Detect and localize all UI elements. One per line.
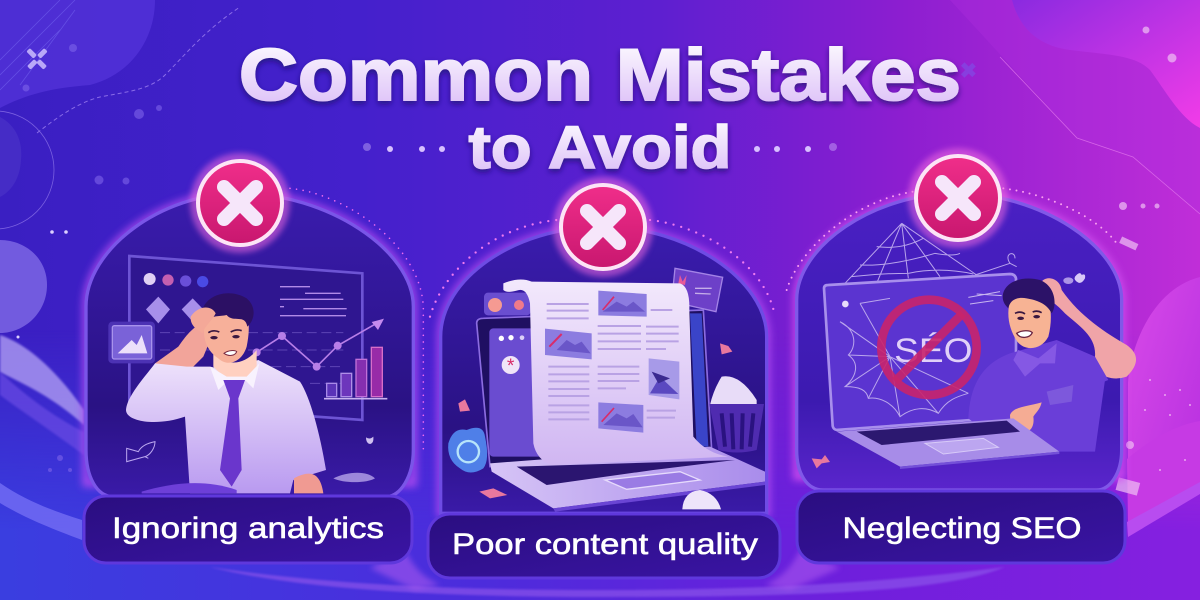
line chart [253, 319, 384, 371]
panel: neglecting seo [787, 188, 1136, 490]
badge: error x 2 [553, 177, 653, 277]
pill label: poor content quality [428, 514, 780, 578]
floating bubble icon [1063, 273, 1085, 284]
panel frame 2 [441, 227, 767, 513]
panel glow 2 [441, 227, 767, 513]
dashboard screen [129, 256, 362, 420]
hanger doodle [975, 254, 1017, 275]
laptop screen [477, 310, 712, 467]
title [239, 35, 961, 181]
floating note card [672, 268, 723, 312]
scribble [333, 473, 375, 482]
heart icon [366, 437, 373, 444]
pill label: poor content quality: Poor content quality [452, 528, 758, 561]
panel frame 1 [86, 193, 413, 497]
crumpled paper [682, 490, 721, 509]
laptop screen [824, 274, 1016, 430]
rocket icon [127, 442, 155, 462]
title line 1: Common Mistakes [239, 35, 961, 116]
panel glow 1 [86, 193, 413, 483]
cobweb top [845, 223, 977, 283]
man: neglecting seo [968, 278, 1136, 452]
man: ignoring analytics [126, 293, 326, 493]
panel: ignoring analytics [86, 188, 423, 497]
no seo symbol [881, 300, 977, 395]
pill label: neglecting seo: Neglecting SEO [842, 512, 1082, 545]
laptop base [490, 447, 765, 512]
pill label: neglecting seo [797, 491, 1125, 563]
bar chart [324, 347, 387, 399]
laptop screen: * [507, 356, 515, 377]
document page [503, 280, 728, 465]
confetti scraps [458, 343, 732, 498]
badge: error x 3 [908, 148, 1008, 248]
no seo symbol: SÉO [894, 331, 972, 370]
dotted glow arc 3 [787, 188, 1117, 290]
image icon [108, 322, 155, 363]
title decorative dots [363, 143, 837, 152]
panel frame 3 [797, 193, 1122, 490]
title line 2: to Avoid [468, 114, 732, 181]
paper plane scrap [812, 455, 830, 468]
browser tab chip [484, 293, 531, 315]
cobweb on screen [840, 298, 968, 417]
dotted glow arc 2 [430, 220, 775, 317]
pill label: ignoring analytics [84, 496, 412, 563]
pill label: ignoring analytics: Ignoring analytics [112, 512, 384, 545]
gear blob [448, 428, 487, 472]
trash bin with crumpled paper [709, 376, 764, 452]
dotted glow arc 1 [290, 188, 423, 450]
panel: poor content quality [430, 220, 775, 513]
sparkle x icon [26, 48, 48, 70]
panel glow 3 [797, 193, 1122, 477]
badge: error x 1 [190, 153, 290, 253]
laptop keyboard base [837, 418, 1059, 469]
